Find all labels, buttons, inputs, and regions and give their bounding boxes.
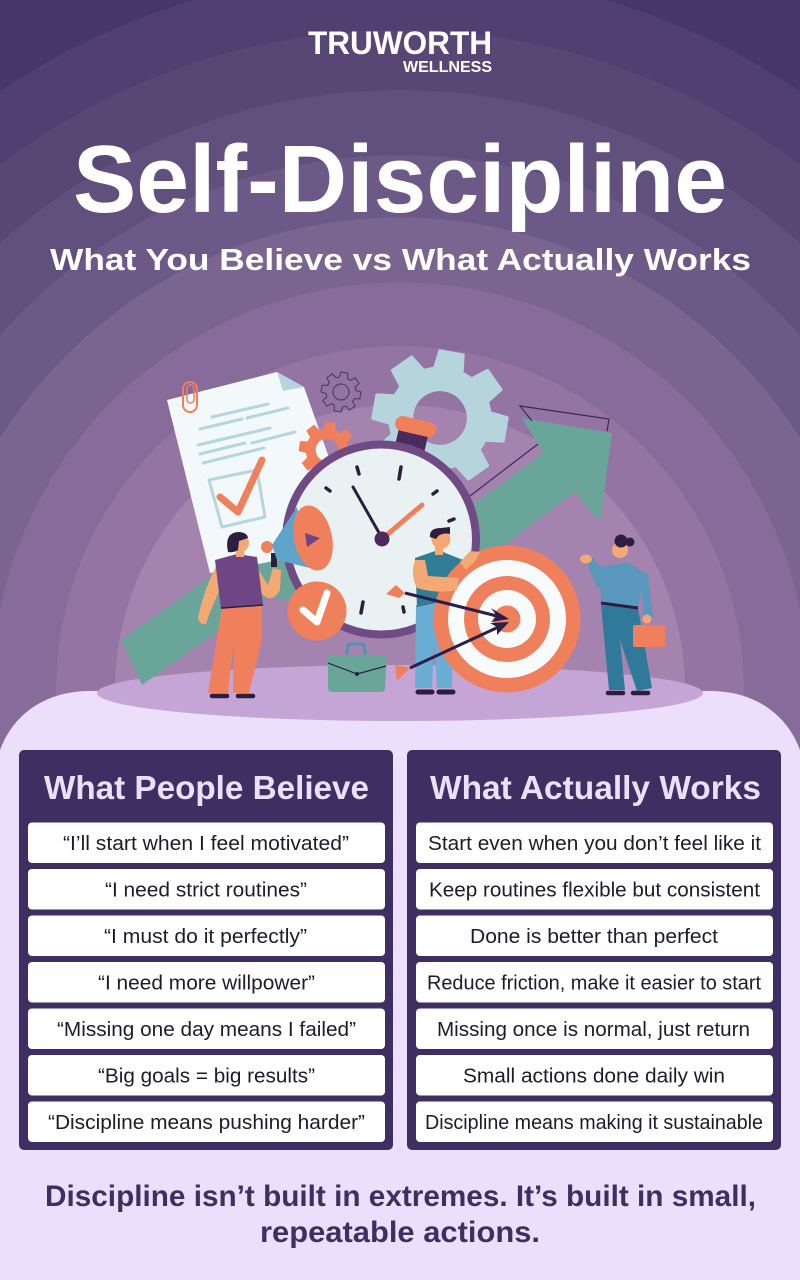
panel: what actually works: Discipline means making it sustainable	[425, 1112, 763, 1134]
icon: small orange gear	[295, 418, 359, 482]
illustration	[97, 342, 703, 721]
icon: briefcase	[328, 644, 387, 692]
heading: what actually works: What Actually Works	[430, 769, 761, 806]
closing message: Discipline isn’t built in extremes. It’s built in small,	[45, 1180, 756, 1213]
icon: target	[434, 546, 580, 692]
panel: what actually works: Missing once is normal, just return	[437, 1019, 750, 1041]
lower background panel	[0, 691, 800, 1280]
panel: what actually works	[407, 750, 781, 1150]
subtitle: What You Believe vs What Actually Works	[50, 242, 751, 277]
panel: what people believe: “I must do it perfectly”	[104, 926, 307, 948]
logo: WELLNESS	[403, 59, 492, 76]
arrow outline	[470, 406, 609, 496]
icon: check badge	[288, 582, 346, 640]
person: woman with bag	[580, 534, 665, 693]
panel: what actually works: Small actions done daily win	[463, 1066, 725, 1088]
panel: what people believe: “Missing one day means I failed”	[57, 1019, 356, 1041]
panel: what actually works: Start even when you don’t feel like it	[428, 833, 761, 855]
platform ellipse	[97, 665, 703, 721]
closing message: repeatable actions.	[260, 1216, 540, 1249]
logo: TRUWORTH	[308, 25, 492, 61]
document with checklist	[167, 372, 360, 573]
arrows in target	[386, 585, 509, 681]
heading: what people believe: What People Believe	[44, 769, 369, 806]
person: woman with megaphone	[198, 532, 281, 696]
logo	[308, 25, 492, 76]
panel: what people believe: “I need more willpower”	[98, 972, 315, 994]
stopwatch	[286, 415, 476, 634]
icon: megaphone	[261, 502, 338, 574]
panel: what people believe: “Discipline means pushing harder”	[48, 1112, 365, 1134]
panel: what actually works: Reduce friction, make it easier to start	[427, 972, 761, 994]
panel: what people believe	[19, 750, 393, 1150]
icon: outline gear	[318, 369, 364, 415]
person: man holding target (body)	[415, 527, 463, 692]
panel: what actually works: Keep routines flexible but consistent	[429, 880, 760, 902]
panel: what people believe: “I need strict routines”	[105, 880, 307, 902]
closing message	[45, 1180, 756, 1249]
panel: what people believe: “Big goals = big results”	[98, 1066, 315, 1088]
title: Self-Discipline	[73, 126, 727, 233]
icon: growth arrow	[121, 418, 612, 685]
panel: what people believe: “I’ll start when I feel motivated”	[63, 833, 349, 855]
icon: large gear	[364, 342, 516, 494]
panel: what actually works: Done is better than perfect	[470, 926, 718, 948]
person: man arms	[413, 551, 480, 592]
